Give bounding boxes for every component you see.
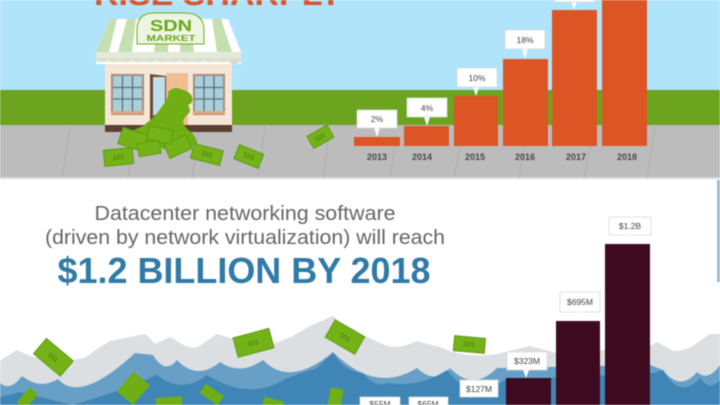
icon: floating bills: 101 <box>247 339 260 349</box>
text: datacenter software intro: (driven by network virtualization) will reach <box>45 227 445 249</box>
icon: money spilling from the door: 101 <box>112 154 124 162</box>
icon: floating bills <box>17 320 486 405</box>
bar chart: SDN market growth <box>354 0 647 162</box>
bar 2013: 2013 <box>367 152 387 162</box>
label $127M <box>460 380 498 397</box>
icon: loose bill: 101 <box>242 151 255 162</box>
bar 2014 <box>404 98 449 162</box>
bar 2015 <box>454 68 498 162</box>
bar 2014: 2014 <box>412 152 432 162</box>
bar $1.2B: $1.2B <box>619 221 641 231</box>
label $65M <box>409 397 448 405</box>
bar 2014: 4% <box>421 103 434 113</box>
bar $323M <box>506 352 551 405</box>
market sign: SDN <box>150 18 192 35</box>
bar 2013: 2% <box>371 114 384 124</box>
icon: money spilling from the door <box>103 88 223 166</box>
bar $323M: $323M <box>514 356 540 366</box>
door <box>150 73 188 125</box>
text: datacenter software intro: Datacenter networking software <box>94 203 396 225</box>
icon: floating bills: 101 <box>463 341 475 349</box>
icon: SDN market storefront <box>96 13 241 132</box>
bar $695M: $695M <box>567 297 593 307</box>
label $127M: $127M <box>466 384 492 394</box>
grey foam wave <box>0 317 720 405</box>
bar 2018 <box>602 0 647 162</box>
bar $695M <box>556 292 600 405</box>
icon: floating bills: 101 <box>338 332 351 344</box>
heading: $1.2 billion by 2018: $1.2 BILLION BY 2018 <box>58 250 430 291</box>
bar 2016: 2016 <box>515 152 535 162</box>
text: datacenter software intro <box>45 203 445 249</box>
icon: loose bill <box>234 145 264 168</box>
right edge sliver <box>717 180 720 282</box>
awning <box>96 19 241 65</box>
label $55M <box>360 397 400 405</box>
market sign <box>137 13 204 44</box>
dark blue wave <box>0 353 720 405</box>
store wall <box>105 62 232 126</box>
bar 2017 <box>552 0 597 162</box>
bar 2015: 10% <box>468 73 486 83</box>
icon: floating bills: 101 <box>46 351 59 364</box>
bar 2013 <box>354 110 400 162</box>
bar 2016: 18% <box>516 35 534 45</box>
bar 2018: 2018 <box>617 152 637 162</box>
bar $1.2B <box>605 217 651 405</box>
icon: loose bill: 101 <box>314 132 327 144</box>
icon: money spilling from the door: 101 <box>200 150 213 160</box>
market sign: MARKET <box>146 33 197 43</box>
panel: SDN market scene <box>0 0 720 179</box>
icon: loose bill <box>307 125 334 149</box>
bar 2015: 2015 <box>465 152 485 162</box>
bar chart: datacenter networking software revenue <box>360 217 651 405</box>
bar 2017: 2017 <box>566 152 586 162</box>
mid blue wave <box>0 352 720 405</box>
right window <box>193 74 225 115</box>
left window <box>111 74 144 115</box>
store base <box>105 125 232 132</box>
bar 2016 <box>503 30 548 162</box>
waves: money sea <box>0 317 720 405</box>
